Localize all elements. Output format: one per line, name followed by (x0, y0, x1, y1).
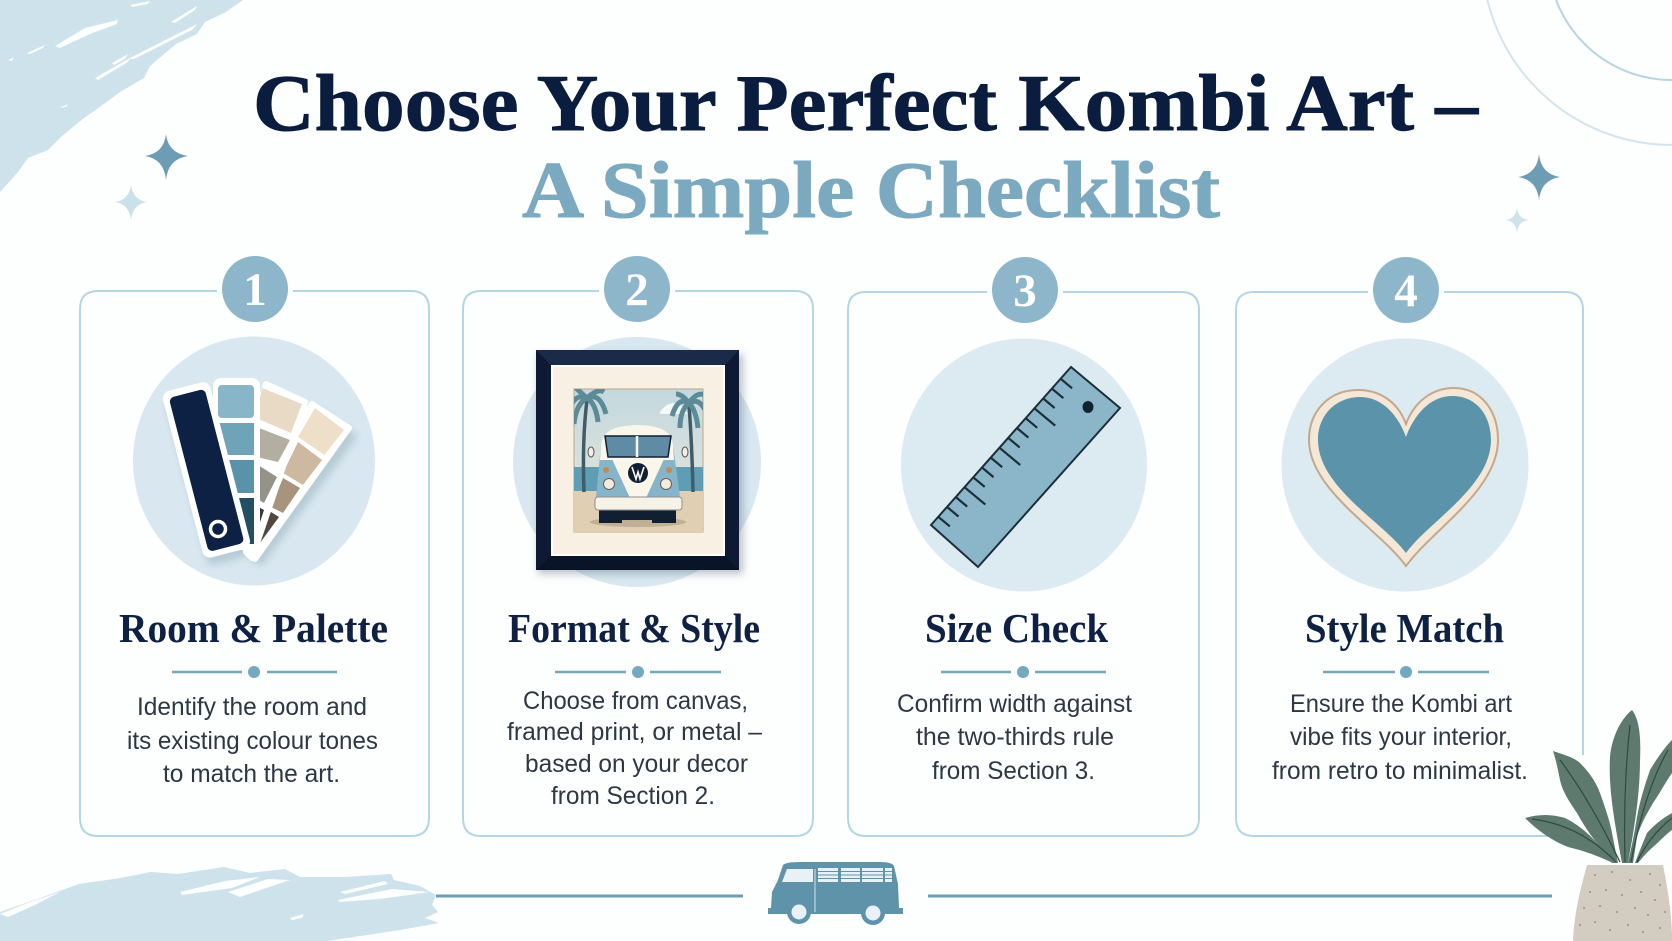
footer line left (436, 894, 743, 898)
heading: Format & Style (508, 605, 760, 651)
heading: Room & Palette (119, 605, 388, 651)
icon backdrop circle (901, 338, 1147, 592)
description: from retro to minimalist. (1272, 757, 1528, 785)
van (590, 519, 686, 527)
step 2 badge: 2 (625, 264, 649, 316)
description: Ensure the Kombi art (1290, 690, 1512, 718)
step 2 badge (604, 256, 670, 322)
description (127, 693, 378, 788)
sparkle: left small (115, 185, 147, 220)
title: A Simple Checklist (522, 145, 1220, 235)
description: from Section 2. (551, 782, 715, 810)
concentric arcs: top right (1482, 0, 1672, 145)
description: Identify the room and (137, 693, 367, 721)
sparkle: left large (145, 134, 188, 180)
divider (172, 666, 337, 678)
title: Choose Your Perfect Kombi Art – (253, 58, 1480, 148)
description: to match the art. (163, 760, 340, 788)
palm left (583, 400, 587, 492)
description (1272, 690, 1528, 785)
description: vibe fits your interior, (1290, 723, 1512, 751)
description (897, 690, 1132, 785)
icon: heart (1309, 388, 1498, 566)
description: Choose from canvas, (523, 687, 748, 715)
panel: step 3 Size Check (848, 257, 1199, 836)
step 3 badge (992, 257, 1058, 323)
icon backdrop circle (1282, 338, 1528, 592)
description: based on your decor (525, 750, 748, 778)
pot (1573, 865, 1672, 941)
description: from Section 3. (932, 757, 1095, 785)
step 1 badge (222, 256, 288, 322)
description: framed print, or metal – (507, 718, 762, 746)
heading: Size Check (925, 605, 1108, 651)
description: Confirm width against (897, 690, 1132, 718)
description (507, 687, 762, 810)
brush stroke: bottom left (0, 867, 439, 941)
step 1 badge: 1 (243, 264, 267, 316)
footer line right (928, 894, 1552, 898)
brush stroke: top left (0, 0, 243, 192)
divider (941, 666, 1106, 678)
icon: ruler (931, 367, 1120, 567)
heading: Style Match (1305, 605, 1504, 651)
plant in pot (1525, 710, 1672, 941)
description: the two-thirds rule (916, 723, 1114, 751)
description: its existing colour tones (127, 727, 378, 755)
leaves (1525, 710, 1672, 863)
palm right (689, 405, 693, 492)
divider (1323, 666, 1489, 678)
icon backdrop circle (133, 336, 375, 586)
panel: step 1 Room & Palette (80, 256, 429, 836)
icon: colour swatch fan (161, 378, 358, 567)
step 4 badge: 4 (1394, 265, 1418, 317)
panel: step 4 Style Match (1236, 257, 1583, 836)
step 3 badge: 3 (1013, 265, 1037, 317)
step 4 badge (1373, 257, 1439, 323)
title (253, 58, 1480, 235)
icon: framed kombi print (536, 350, 743, 574)
divider (555, 666, 721, 678)
panel: step 2 Format & Style (463, 256, 813, 836)
sparkle: right large (1518, 154, 1560, 200)
icon: kombi van silhouette (768, 862, 903, 925)
sparkle: right small (1505, 207, 1529, 233)
icon backdrop circle (513, 337, 761, 587)
